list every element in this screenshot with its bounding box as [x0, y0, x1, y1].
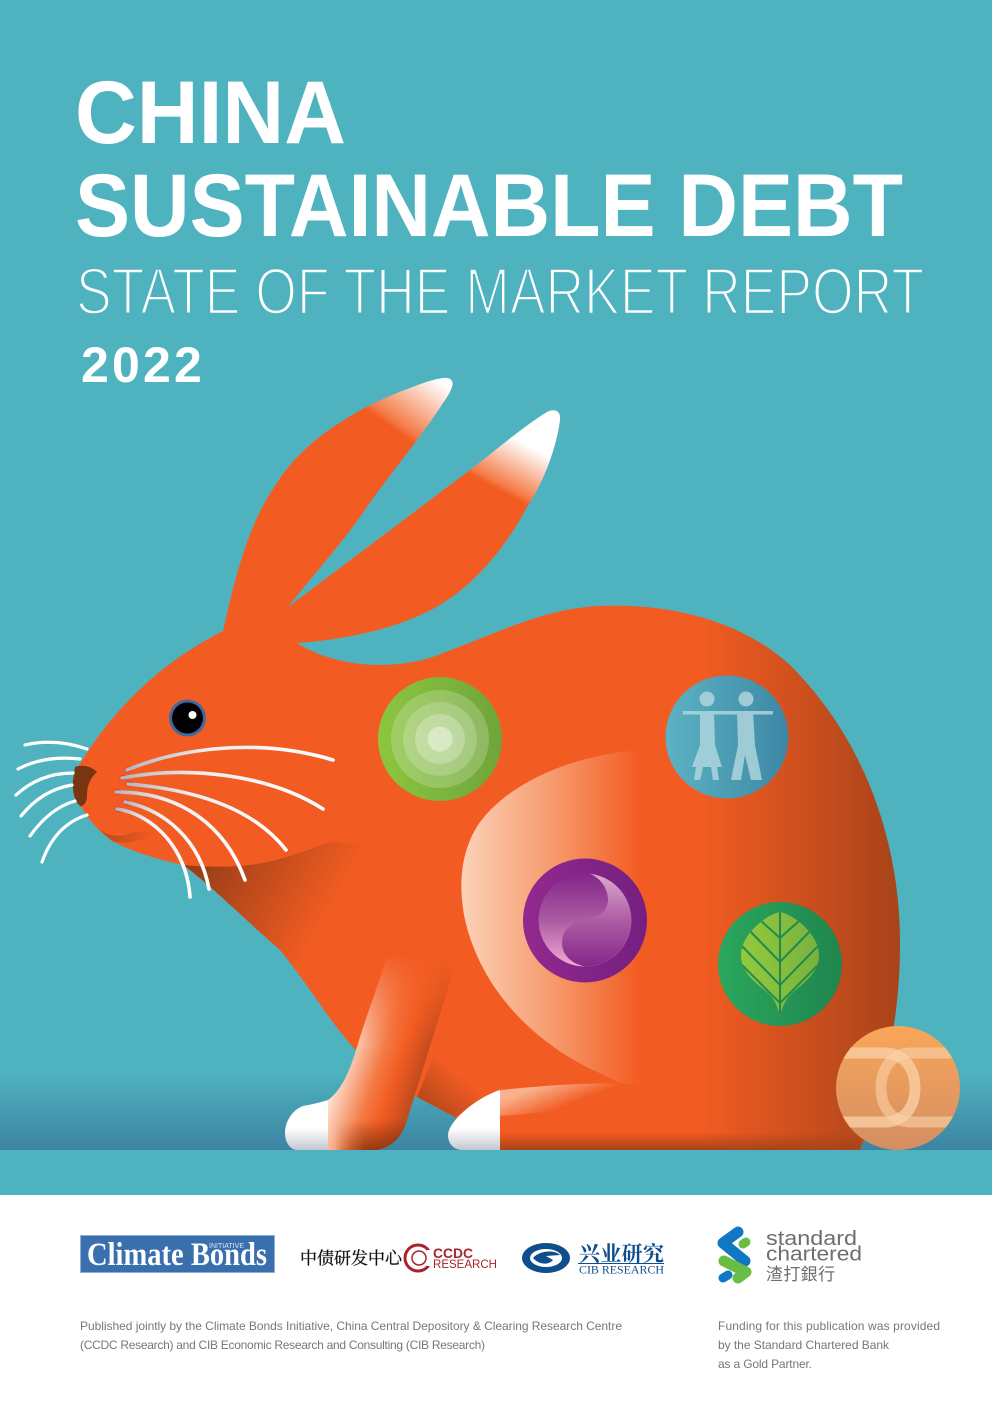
logo: Standard Chartered: 渣打銀行: [766, 1265, 835, 1284]
logo: CCDC Research: RESEARCH: [433, 1257, 497, 1271]
front foot: [285, 1100, 330, 1150]
funding note: as a Gold Partner.: [718, 1357, 812, 1371]
funding note: Funding for this publication was provided: [718, 1319, 940, 1333]
logo: Standard Chartered: standard: [766, 1227, 857, 1250]
publisher note: (CCDC Research) and CIB Economic Research and Consulting (CIB Research): [80, 1338, 485, 1352]
logo: Standard Chartered: [723, 1227, 862, 1284]
publisher note: Published jointly by the Climate Bonds Initiative, China Central Depository & Clearing Research Centre: [80, 1319, 622, 1333]
logo: Climate Bonds: INITIATIVE: [209, 1243, 244, 1250]
ear: back: [222, 378, 453, 640]
logo: CIB Research: 兴业研究: [579, 1242, 664, 1266]
mouth shadow: [97, 827, 155, 842]
leg shape: [328, 954, 453, 1150]
hind foot: [448, 1090, 500, 1150]
logo: Climate Bonds: Climate Bonds: [87, 1237, 267, 1273]
title block: [75, 62, 924, 393]
eye: [169, 700, 206, 736]
icon: purple yin-yang: [523, 858, 647, 982]
right whiskers: [116, 747, 333, 897]
icon: green concentric circles: [378, 677, 502, 801]
logo: CIB Research: CIB RESEARCH: [579, 1262, 664, 1276]
logo: Standard Chartered: chartered: [766, 1242, 862, 1266]
haunch highlight: [461, 750, 640, 1092]
title: China: CHINA: [75, 62, 346, 162]
hind leg highlight: [500, 1084, 672, 1116]
logo: CIB Research: [522, 1242, 664, 1276]
ground shadow band: [0, 1070, 992, 1150]
logo: CCDC Research: [300, 1245, 497, 1271]
front leg: [285, 954, 453, 1150]
body and head: [73, 606, 900, 1150]
base shade: [500, 1132, 860, 1150]
funding note: by the Standard Chartered Bank: [718, 1338, 890, 1352]
belly shadow: [417, 1040, 500, 1117]
publisher note: [80, 1319, 622, 1352]
ear: front: [288, 410, 560, 643]
icon: people: [666, 676, 788, 798]
funding note: [718, 1319, 940, 1371]
leg base shading: [336, 1122, 405, 1150]
nose: [73, 766, 97, 806]
year: 2022: [81, 337, 202, 393]
left whiskers: [16, 742, 87, 862]
rabbit illustration: [16, 378, 900, 1150]
title: Sustainable Debt: SUSTAINABLE DEBT: [75, 155, 903, 255]
logo: CCDC Research: CCDC: [433, 1245, 473, 1261]
icon: leaf: [718, 902, 842, 1026]
icon: orange chain ball: [830, 1026, 966, 1150]
chest shadow: [185, 842, 354, 986]
white footer panel: [0, 1195, 992, 1403]
logo: CCDC Research: 中债研发中心: [300, 1249, 403, 1268]
